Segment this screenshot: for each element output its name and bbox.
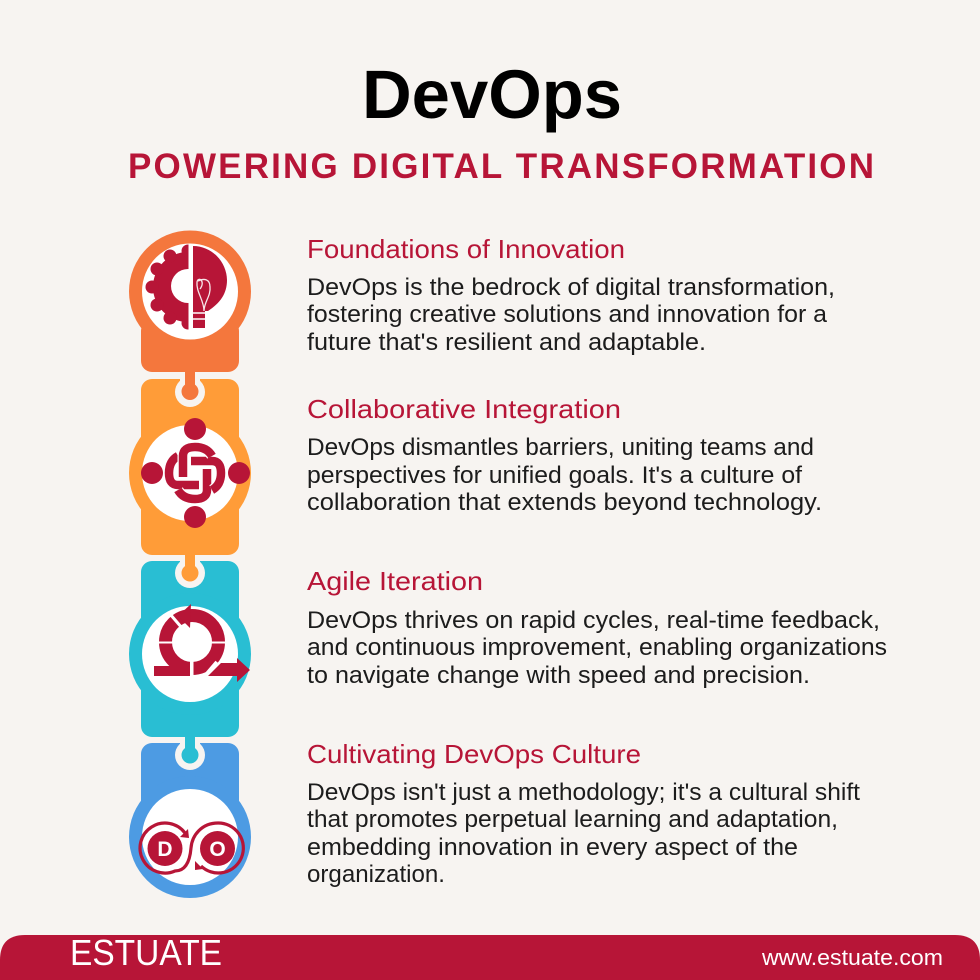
puzzle piece: orange: [129, 230, 251, 372]
text block: Cultivating DevOps Culture: that promotes perpetual learning and adaptation,: [307, 806, 838, 833]
text block: Agile Iteration: and continuous improvement, enabling organizations: [307, 634, 887, 661]
icon: DO infinity loop: D: [157, 838, 173, 861]
text block: Collaborative Integration: [307, 394, 822, 516]
text block: Collaborative Integration: perspectives for unified goals. It's a culture of: [307, 462, 802, 489]
icon: four people interlinked: [141, 418, 250, 528]
text block: Agile Iteration: DevOps thrives on rapid cycles, real-time feedback,: [307, 607, 880, 634]
puzzle piece: teal: [129, 553, 251, 737]
text block: Cultivating DevOps Culture: DevOps isn't just a methodology; it's a cultural shift: [307, 779, 860, 806]
text block: Foundations of Innovation: [307, 234, 835, 356]
icon: DO infinity loop: [140, 789, 243, 885]
text block: Cultivating DevOps Culture: [307, 739, 860, 888]
website: www.estuate.com: [761, 945, 943, 970]
icon: agile sprint loop: [142, 604, 250, 702]
text block: Cultivating DevOps Culture: embedding innovation in every aspect of the: [307, 834, 798, 861]
panel: puzzle column: [129, 230, 251, 898]
text block: Agile Iteration: to navigate change with speed and precision.: [307, 662, 810, 689]
text block: Collaborative Integration: collaboration that extends beyond technology.: [307, 489, 822, 516]
title: DevOps: [362, 56, 622, 133]
text block: Foundations of Innovation: future that's resilient and adaptable.: [307, 329, 706, 356]
subtitle: POWERING DIGITAL TRANSFORMATION: [128, 147, 874, 186]
text block: Foundations of Innovation: DevOps is the bedrock of digital transformation,: [307, 274, 835, 301]
puzzle piece: blue: [129, 735, 251, 898]
text block: Foundations of Innovation: fostering creative solutions and innovation for a: [307, 301, 828, 328]
text block: Cultivating DevOps Culture: organization.: [307, 861, 445, 888]
text block: Collaborative Integration: Collaborative Integration: [307, 394, 621, 424]
footer band: [0, 932, 980, 980]
icon: DO infinity loop: O: [209, 838, 226, 861]
text block: Collaborative Integration: DevOps dismantles barriers, uniting teams and: [307, 434, 814, 461]
text block: Agile Iteration: [307, 566, 887, 689]
text block: Foundations of Innovation: Foundations of Innovation: [307, 234, 625, 264]
text block: Agile Iteration: Agile Iteration: [307, 566, 483, 596]
text block: Cultivating DevOps Culture: Cultivating DevOps Culture: [307, 739, 641, 769]
brand name: ESTUATE: [70, 932, 222, 973]
icon: gear and light bulb: [142, 244, 238, 340]
puzzle piece: amber: [129, 370, 251, 555]
